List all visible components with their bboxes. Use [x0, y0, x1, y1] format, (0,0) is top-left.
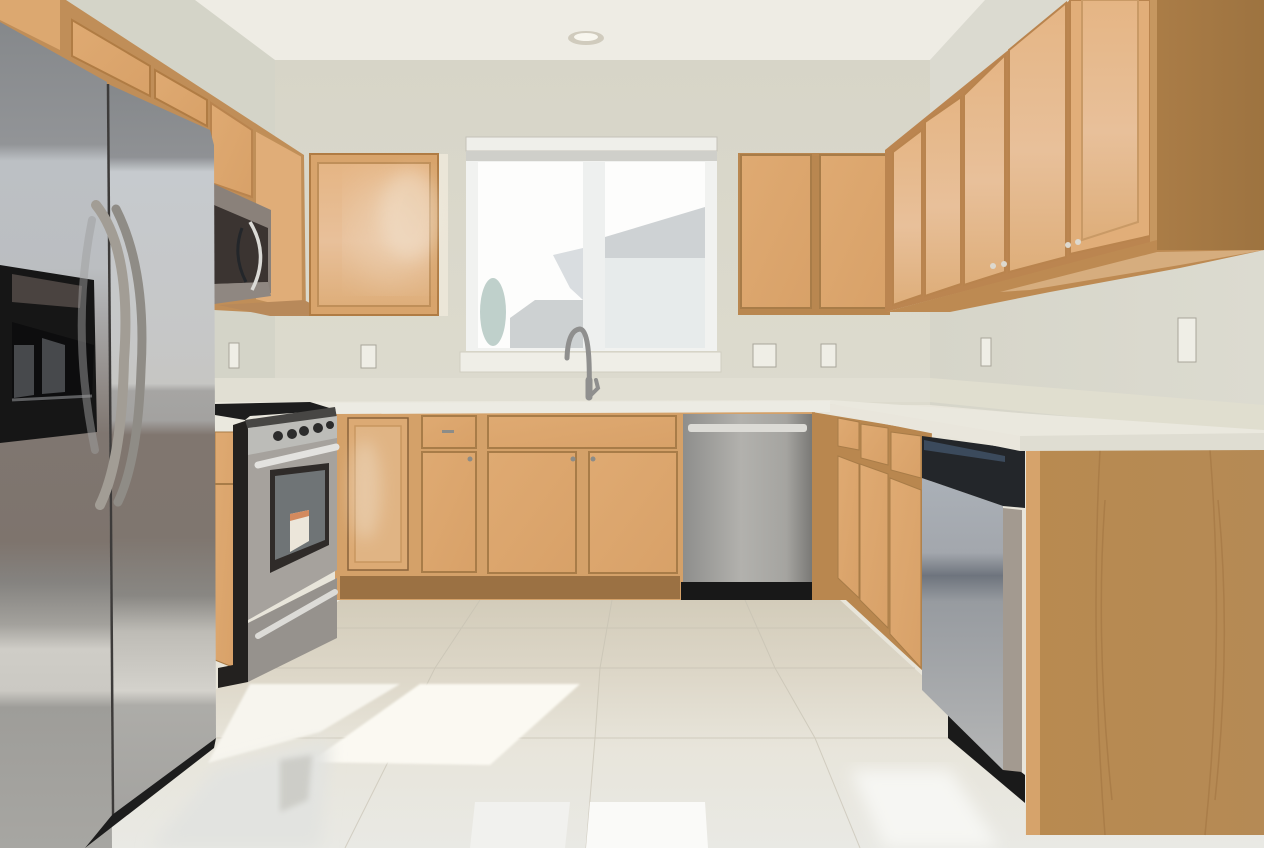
backsplash ledge — [214, 378, 1264, 436]
upper cabinets: right of window — [738, 153, 890, 315]
house outside window — [480, 207, 705, 348]
dishwasher: right — [922, 436, 1025, 803]
door handles — [82, 205, 142, 505]
water dispenser — [0, 265, 97, 443]
peninsula wood panel — [1026, 450, 1264, 835]
floor reflections — [150, 740, 1000, 848]
back wall — [275, 60, 930, 405]
ceiling — [190, 0, 990, 60]
right door — [108, 84, 216, 815]
right wall — [930, 0, 1264, 435]
left door — [0, 22, 112, 848]
steam haze — [349, 170, 440, 540]
floor — [80, 600, 1264, 848]
upper cabinets: left wall — [0, 0, 335, 316]
wall outlets and switches — [229, 318, 1196, 368]
window — [460, 137, 721, 372]
upper cabinets: right wall — [885, 0, 1264, 312]
faucet — [567, 329, 598, 397]
base cabinets: right run — [812, 412, 932, 672]
microwave — [214, 184, 271, 304]
dishwasher: back — [681, 414, 812, 600]
upper cabinet: left of window — [310, 154, 448, 316]
base cabinets: back run — [335, 412, 815, 600]
left wall — [60, 0, 275, 400]
oven drawer — [248, 578, 337, 682]
refrigerator — [0, 22, 216, 848]
oven door — [248, 438, 337, 620]
stove — [215, 402, 337, 688]
countertop — [215, 400, 1264, 451]
left base cabinet strip — [215, 432, 235, 668]
sunlight patches on floor — [208, 684, 580, 765]
